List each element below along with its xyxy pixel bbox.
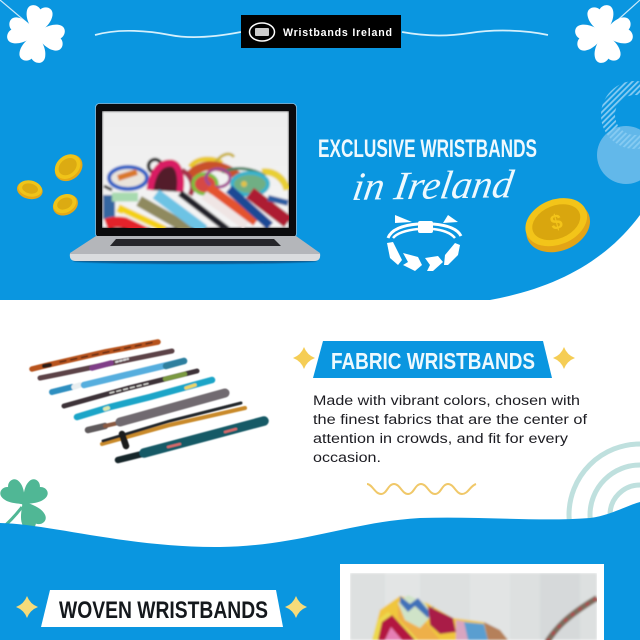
logo: Wristbands Ireland — [241, 15, 401, 48]
text: fabric description: the finest fabrics that are the center of — [313, 412, 587, 427]
decoration: teal rings — [569, 444, 640, 586]
star: woven right — [285, 596, 307, 618]
icon: large dollar coin: $ — [548, 210, 565, 235]
band 3 — [52, 361, 184, 392]
wristbands photo — [102, 111, 289, 232]
text: fabric description: Made with vibrant colors, chosen with — [313, 393, 580, 408]
star: fabric right — [553, 347, 575, 369]
image: fabric wristbands — [32, 342, 264, 460]
coin 1 — [49, 149, 88, 187]
band 6 — [88, 393, 225, 430]
band 7 — [102, 403, 245, 446]
laptop shadow — [73, 258, 317, 264]
icon: white clover right — [574, 0, 640, 64]
icon: bracelet — [387, 215, 461, 271]
text: fabric description: attention in crowds, and fit for every — [313, 431, 568, 446]
logo: Wristbands Ireland: Wristbands Ireland — [283, 27, 392, 39]
band 4 — [64, 371, 197, 406]
band 8 — [118, 421, 264, 460]
decoration: yellow squiggle — [367, 484, 476, 494]
photo: woven wristband frame — [340, 564, 604, 640]
panel: woven section background — [0, 502, 640, 640]
laptop keyboard — [110, 239, 281, 246]
icon: large dollar coin — [517, 189, 598, 261]
heading: in Ireland: in Ireland — [350, 161, 517, 209]
laptop with wristbands photo — [70, 104, 320, 264]
decoration: wavy line right — [402, 31, 548, 36]
banner: woven wristbands: WOVEN WRISTBANDS — [59, 597, 268, 624]
panel: hero background — [0, 0, 640, 300]
text: fabric description — [313, 393, 587, 465]
band 2 — [40, 351, 172, 378]
banner: fabric wristbands: FABRIC WRISTBANDS — [331, 348, 535, 374]
banner: woven wristbands — [41, 590, 283, 627]
laptop screen frame — [96, 104, 296, 238]
woven wristband photo — [350, 573, 597, 640]
coins small — [15, 149, 88, 219]
star: fabric left — [293, 347, 315, 369]
laptop base — [70, 236, 320, 261]
icon: green shamrock — [0, 477, 50, 532]
decoration: wavy line left — [95, 31, 241, 37]
heading: exclusive wristbands: EXCLUSIVE WRISTBANDS — [318, 135, 537, 163]
decoration: pale circle — [597, 126, 640, 184]
band 1 — [32, 342, 158, 369]
decoration: striped ring — [608, 88, 640, 142]
coin 2 — [15, 178, 44, 201]
banner: fabric wristbands — [313, 341, 552, 378]
star: woven left — [16, 596, 38, 618]
icon: white clover left — [0, 0, 66, 64]
text: fabric description: occasion. — [313, 450, 381, 465]
band 5 — [77, 380, 212, 417]
coin 3 — [49, 190, 81, 219]
